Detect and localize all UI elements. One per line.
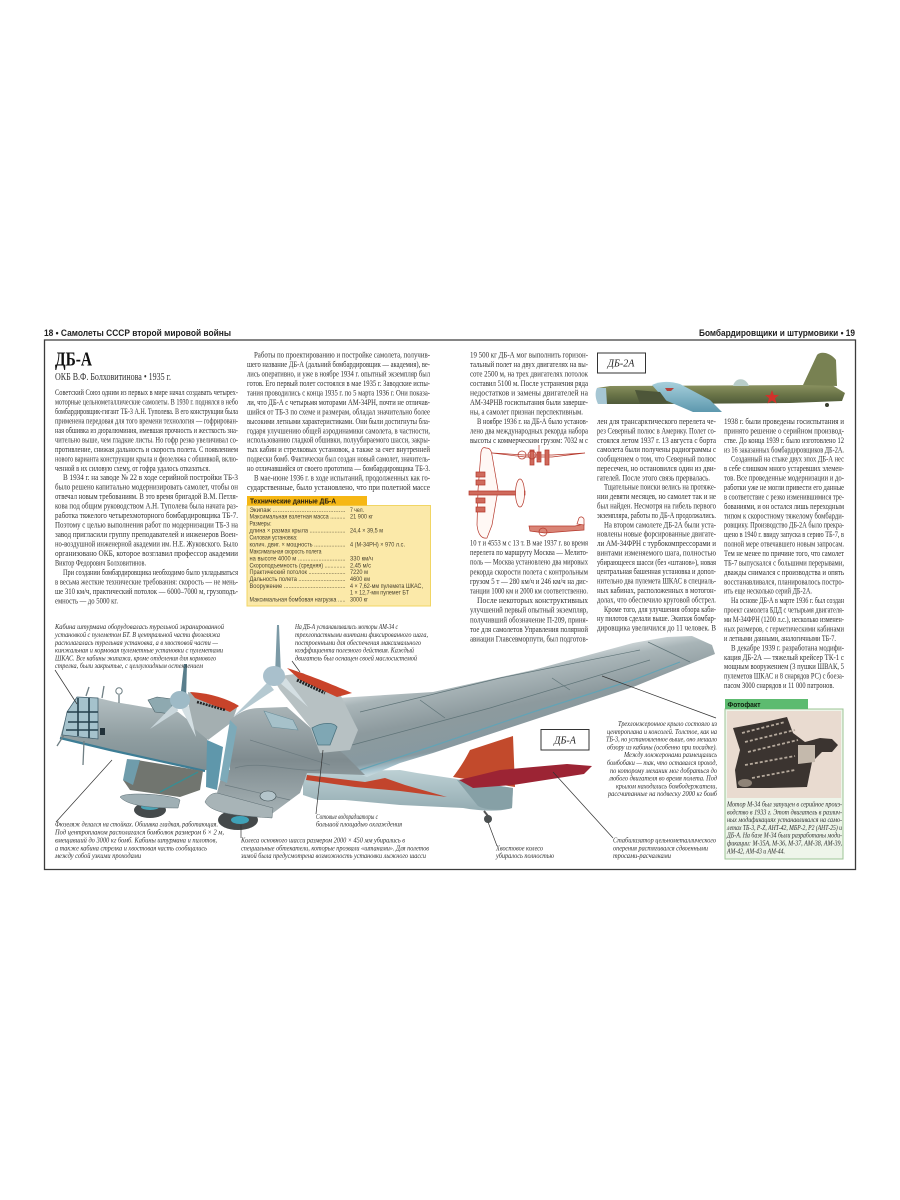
text column 2: высокими летными характеристиками. Они были достигнуты бла- — [247, 417, 430, 426]
text column 3 top: составил 5100 м. После устранения ряда — [470, 379, 588, 388]
technical data rows: Практический потолок ........................ — [250, 569, 346, 576]
callout: wheels: специальные обтекатели, которые прозвали «штанами». Для полетов — [241, 844, 429, 852]
text column 5: В декабре 1939 г. разработана модифи- — [731, 643, 844, 652]
cockpit — [148, 697, 172, 714]
photo fact caption — [726, 800, 843, 855]
text column 3 bottom — [470, 538, 589, 644]
main wing — [330, 636, 715, 777]
callout: fuselage: Фюзеляж делался на стойках. Обшивка гладкая, работающая. — [55, 820, 218, 828]
label: DB-A: ДБ-А — [553, 736, 577, 746]
photo fact caption: АМ-42, АМ-43 и АМ-44. — [726, 847, 785, 855]
callout: wheels — [240, 836, 429, 860]
text column 1: ше 310 км/ч, практический потолок — 6000–7000 м, грузоподъ- — [55, 587, 238, 596]
text column 5: кация ДБ-2А — тяжелый крейсер ТК-1 с — [724, 653, 844, 662]
nose glazing — [62, 697, 98, 739]
outer propeller — [233, 625, 308, 717]
technical data rows: Вооружение ....................................... — [250, 583, 346, 590]
text column 4: долах, что обеспечило круговой обстрел. — [597, 595, 716, 604]
text column 4: нии девяти месяцев, но самолет так и не — [597, 492, 716, 501]
callout: wing: бомбобаки — так, что оставался проход, — [607, 759, 717, 767]
text column 4 — [597, 417, 716, 633]
DB-2A red wing star — [665, 388, 674, 391]
DB-2A side-view profile — [596, 353, 845, 412]
callout: wing: любого двигателя во время полета. Под — [608, 775, 717, 783]
text column 1 — [55, 388, 239, 605]
text column 1: В 1934 г. на заводе № 22 в ходе серийной постройки ТБ-3 — [63, 473, 238, 482]
panel: technical data — [247, 496, 430, 606]
text column 5: стве. До конца 1939 г. было изготовлено 12 — [724, 436, 844, 445]
technical data rows: 7220 м — [350, 569, 368, 576]
nose guns and aerials — [57, 686, 119, 765]
text column 2: использованию гладкой обшивки, полуубираемого шасси, закры- — [247, 436, 430, 445]
callout: engines: построенными для обеспечения максимального — [295, 639, 421, 647]
subtitle: ОКБ В.Ф. Болховитинова • 1935 г. — [55, 372, 171, 383]
text column 5: Созданный на стыке двух эпох ДБ-А нес — [731, 455, 844, 464]
technical data rows: 3000 кг — [350, 596, 369, 603]
text column 4: стоялся летом 1937 г. 13 августа с борта — [597, 436, 716, 445]
text column 3 top: лено два международных рекорда набора — [470, 426, 588, 436]
text column 5: мощным вооружением (3 пушки ШВАК, 5 — [724, 662, 844, 671]
technical data rows: Скороподъемность (средняя) .............. — [250, 562, 346, 569]
text column 2: подвески бомб. Фактически был создан новый самолет, значитель- — [247, 455, 430, 464]
callout: tail wheel — [495, 844, 554, 860]
text column 1: моторные цельнометаллические самолеты. В 1930 г. поднялся в небо — [55, 398, 238, 406]
DB-2A fuselage — [597, 385, 845, 404]
callout: wing: ТБ-3, но установленное выше, оно мешало — [606, 736, 717, 744]
text column 4: рез Северный полюс в Америку. Полет со- — [597, 426, 716, 435]
technical data rows: Силовая установка: — [250, 534, 298, 541]
text column 5: восстанавливался, планировалось постро- — [724, 577, 844, 586]
text column 3 bottom: улучшений первый опытный экземпляр, — [470, 606, 588, 615]
text column 1: организовано ОКБ, которое возглавил профессор академии — [55, 549, 238, 558]
technical data rows: Размеры: — [250, 521, 272, 528]
title: ДБ-А — [55, 348, 92, 370]
technical data rows: 4 (М-34РН) × 970 л.с. — [350, 541, 405, 548]
text column 3 top: В ноябре 1936 г. на ДБ-А было установ- — [477, 417, 588, 426]
nose side window — [100, 728, 105, 735]
text column 1: нового варианта конструкции крыла и фюзеляжа с обшивкой, вклю- — [55, 454, 238, 463]
landing gear legs — [206, 740, 223, 790]
callout: fuselage — [54, 820, 224, 860]
text column 5: На основе ДБ-А в марте 1936 г. был создан — [731, 596, 844, 605]
callout: cockpit armament: ШКАС. Все кабины экипажа, кроме отделения для кормового — [54, 654, 216, 662]
text column 2: ли, что ДБ-А с четырьмя моторами АМ-34РН, почти не отличав- — [247, 398, 430, 407]
text column 3 top: недостатков и замены двигателей на — [470, 388, 588, 398]
text column 4: новлены новые форсированные двигате- — [597, 530, 716, 539]
text column 3 bottom: перелета по маршруту Москва — Мелито- — [470, 548, 588, 557]
technical data rows: колич. двиг. × мощность .................... — [250, 541, 346, 548]
text column 3 top: АМ-34РНВ госиспытания были заверше- — [470, 398, 588, 407]
text column 1: отвечал новым требованиям. В это время бригадой В.М. Петля- — [55, 492, 238, 501]
callout: cockpit armament — [54, 623, 224, 670]
text column 5: дважды снимался с производства и опять — [724, 568, 844, 577]
technical data rows: 21 900 кг — [350, 514, 374, 521]
callout: engines: двигатель был оснащен своей маслосистемой — [295, 654, 417, 662]
DB-2A tail fin — [803, 353, 837, 386]
text column 5: из 16 заказанных бомбардировщиков ДБ-2А. — [724, 445, 844, 454]
technical data rows: Максимальная скорость полета — [250, 548, 322, 555]
text column 1: чительно выше, чем гладкие листы. Но гофр резко увеличивал со- — [55, 435, 238, 444]
text column 2: тых кабин и стрелковых установок, а также за счет внутренней — [247, 445, 430, 454]
inner propeller — [150, 664, 196, 737]
text column 4: На втором самолете ДБ-2А были уста- — [604, 520, 716, 529]
technical data rows: 24,4 × 39,5 м — [350, 528, 383, 535]
technical data rows — [250, 507, 423, 603]
text column 5: бованиями, и он остался лишь переходным — [724, 502, 845, 511]
text column 5: полной мере отвечавшего новым запросам. — [724, 540, 844, 549]
DB-2A canopy — [733, 379, 749, 386]
side view — [529, 517, 584, 536]
callout: stabilizer: Стабилизатор цельнометаллического — [613, 836, 716, 844]
text column 5: щено в 1940 г. ввиду запуска в серию ТБ-7, в — [724, 530, 844, 539]
text column 5: в соответствие с резко изменившимися тре- — [724, 492, 844, 501]
callout: tail wheel: Хвостовое колесо — [495, 844, 543, 852]
text column 4: лен для трансарктического перелета че- — [597, 417, 716, 426]
exhaust stubs — [297, 680, 325, 693]
callout: cockpit armament: располагалась турельная установка, а в хвостовой части — — [54, 639, 219, 647]
callout: cockpit armament: Кабина штурмана оборудовалась турельной экранированной — [54, 623, 224, 631]
text column 2: сударственные, было установлено, что при полетной массе — [247, 483, 430, 492]
text column 5: Тем не менее по причине того, что самолет — [724, 549, 844, 558]
text column 5: типом к скоростному тяжелому бомбарди- — [724, 511, 844, 520]
technical data rows: 330 км/ч — [350, 555, 373, 562]
callout: stabilizer — [613, 836, 716, 860]
text column 2: готов. Его первый полет состоялся в мае 1935 г. Заводские испы- — [247, 379, 430, 388]
text column 1: работка тяжелого четырехмоторного бомбардировщика ТБ-7. — [55, 511, 238, 520]
tail unit dark underside — [457, 780, 513, 810]
technical data heading: Технические данные ДБ-А — [250, 497, 336, 506]
text column 4: ну пилотов сделали выше. Экипаж бомбар- — [597, 614, 716, 623]
DB-2A red star — [765, 390, 779, 404]
text column 4: центральная башенная установка и допол- — [597, 567, 716, 576]
text column 4: гателей. После этого связь прервалась. — [597, 473, 710, 482]
rear fuselage red stripe — [306, 775, 447, 797]
text column 5: работки уже не могли привести его данные — [724, 483, 844, 492]
photo fact caption: Мотор М-34 был запущен в серийное произ- — [726, 800, 843, 808]
text column 3 bottom: получивший обозначение П-209, приня- — [470, 615, 588, 624]
forward fuselage — [60, 697, 207, 770]
text column 1: в весьма жесткие технические требования: скорость — не мень- — [55, 577, 238, 586]
text column 3 top: ны, а самолет признан перспективным. — [470, 408, 583, 416]
text column 3 top — [470, 350, 589, 445]
technical data rows: длина × размах крыла ....................... — [250, 528, 346, 535]
text column 3 bottom: рекорда скорости полета с контрольным — [470, 567, 589, 576]
technical data rows: 2,45 м/с — [350, 562, 371, 569]
text column 5: ровщику. Производство ДБ-2А было прекра- — [724, 521, 844, 530]
bomb bay belly — [123, 760, 203, 797]
callout: wing: по которому механик мог добраться до — [610, 767, 717, 775]
text column 1: Советский Союз одним из первых в мире начал создавать четырех- — [55, 388, 238, 397]
text column 5: и летными данными, аналогичными ТБ-7. — [724, 634, 836, 643]
text column 5: принято решение о серийном производ- — [724, 426, 844, 435]
text column 1: противление, снижая дальность и скорость полета. С появлением — [55, 445, 239, 454]
text column 3 top: высоты с коммерческим грузом: 7032 м с — [470, 436, 588, 445]
tail fin — [453, 736, 515, 787]
text column 3 bottom: грузом 5 т — 280 км/ч и 246 км/ч на дис- — [470, 577, 588, 586]
technical data rows: Экипаж ........................................... — [250, 507, 346, 514]
outer wheel fairing — [205, 793, 273, 818]
three-view red line drawing — [469, 445, 585, 538]
text column 5: проект самолета БДД с четырьмя двигателя- — [724, 606, 844, 615]
callout: fuselage: между собой узкими проходами — [54, 852, 141, 860]
large centre nacelle — [217, 707, 365, 813]
text column 1: применена передовая для того времени технология — гофрирован- — [55, 416, 238, 425]
text column 1: было решено капитально модернизировать самолет, чтобы он — [55, 483, 238, 492]
running head: left: 18 • Самолеты СССР второй мировой войны — [44, 328, 231, 339]
text column 1: Поэтому с целью выполнения работ по модернизации ТБ-3 на — [55, 521, 238, 530]
inner wheel — [134, 802, 166, 818]
callout: cockpit armament: кинжальная и кормовая пулеметные установки с пулеметами — [55, 646, 223, 654]
technical data rows: на высоте 4000 м .............................. — [250, 555, 346, 562]
callout: fuselage: вмещавший до 3000 кг бомб. Кабины штурмана и пилотов, — [55, 836, 217, 844]
text column 1: При создании бомбардировщика необходимо было укладываться — [63, 568, 238, 577]
inner landing gear strut — [123, 759, 140, 785]
callout: engines: На ДБ-А устанавливались моторы АМ-34 с — [294, 623, 399, 631]
fuselage lower blue edge — [60, 738, 205, 771]
text column 5: тов. Все проведенные модернизации и до- — [724, 474, 844, 483]
photo fact caption: фикации: М-35А, М-36, М-37, АМ-38, АМ-39, — [727, 840, 842, 848]
page frame — [44, 340, 856, 870]
callout: cockpit armament: установкой с пулеметом БТ. В центральной части фюзеляжа — [54, 631, 220, 639]
tail wheel — [484, 811, 488, 816]
photo fact caption: летах ТБ-3, Р-Z, АНТ-42, МБР-2, Р2 (АНТ-25) и — [726, 824, 842, 832]
photo fact caption: водство в 1933 г. Этот двигатель в различ- — [727, 808, 843, 816]
panel: photo fact — [725, 699, 843, 859]
outer engine red top — [287, 668, 352, 697]
callout: wheels: зимой была предусмотрена возможность установки лыжного шасси — [240, 852, 426, 860]
callout: wing — [606, 720, 717, 798]
leader lines — [55, 661, 716, 846]
text column 3 bottom: танции 1000 км и 2000 км соответственно. — [470, 586, 588, 596]
text column 4: дировщика увеличился до 11 человек. В — [597, 624, 716, 633]
text column 3 bottom: После некоторых конструктивных — [477, 596, 589, 605]
callout: fuselage: а также кабина стрелка и хвостовая часть сообщались — [55, 844, 207, 852]
text column 1: ченной в их силовую схему, от гофра удалось отказаться. — [55, 464, 210, 473]
callout: engines — [294, 623, 428, 662]
callout: tail wheel: убиралось полностью — [495, 852, 554, 860]
DB-2A engine — [635, 390, 668, 404]
text column 4: ных кабинах, расположенных в мотогон- — [597, 586, 716, 595]
text column 4: сообщением о том, что Северный полюс — [597, 455, 716, 464]
text column 2 — [247, 350, 430, 492]
text column 1: емность — до 5000 кг. — [55, 596, 118, 605]
text column 4: винтами изменяемого шага, полностью — [597, 548, 716, 558]
text column 4: Кроме того, для улучшения обзора каби- — [604, 605, 716, 614]
text column 5: ми М-34ФРН (1200 л.с.), несколько изменен- — [724, 615, 844, 624]
text column 3 top: соте 2500 м, на трех двигателях потолок — [470, 370, 589, 378]
text column 5: пасом 3000 снарядов и 11 000 патронов. — [724, 681, 834, 690]
text column 5 — [724, 417, 845, 690]
text column 2: лись оперативно, и уже в ноябре 1934 г. опытный экземпляр был — [247, 369, 430, 378]
text column 4: самолета были получены радиограммы с — [597, 445, 716, 454]
inner engine nacelle — [188, 692, 238, 740]
callout: wing: Трехлонжеронное крыло состояло из — [618, 720, 717, 728]
rear fuselage — [303, 770, 513, 811]
text column 2: шего название ДБ-А (дальний бомбардировщик — академия), ве- — [247, 360, 430, 369]
label: DB-A — [541, 730, 589, 750]
text column 3 bottom: тое для самолетов Управления полярной — [470, 625, 588, 634]
technical data rows: 4 × 7,62-мм пулемета ШКАС, — [350, 583, 423, 590]
text column 4: Тщательные поиски велись на протяже- — [604, 483, 716, 492]
technical data rows: 1 × 12,7-мм пулемет БТ — [350, 590, 409, 597]
plan view — [469, 448, 525, 538]
callout: wheels: Колеса основного шасси размером 2000 × 450 мм убирались в — [240, 836, 405, 844]
inner engine red cowl — [190, 692, 239, 712]
technical data rows: 7 чел. — [350, 507, 364, 514]
text column 4: убирающееся шасси (без «штанов»), новая — [597, 558, 716, 567]
technical data rows: Максимальная взлетная масса .......... — [250, 514, 346, 521]
callout: wing: Между лонжеронами размещались — [623, 751, 717, 759]
text column 2: В мае-июне 1936 г. в ходе испытаний, продолженных как го- — [254, 474, 430, 483]
callout: fuselage: Под центропланом располагался бомболюк размером 6 × 2 м, — [54, 828, 224, 836]
callout: stabilizer: тросами-расчалками — [613, 852, 671, 860]
photo fact heading — [725, 699, 808, 709]
inner wheel fairing — [120, 794, 180, 808]
text column 3 bottom: поль — Москва установлено два мировых — [470, 558, 589, 567]
text column 2: Работы по проектированию и постройке самолета, получив- — [254, 350, 430, 360]
text column 2: шийся от ТБ-3 по схеме и размерам, обладал значительно более — [247, 407, 430, 416]
text column 4: был найден. Несмотря на гибель первого — [597, 502, 716, 510]
text column 1: бомбардировщик-гигант ТБ-3 А.Н. Туполева. В его конструкции была — [55, 407, 238, 416]
text column 2: годаря улучшению общей аэродинамики самолета, в частности, — [247, 426, 430, 435]
text column 3 top: тальный полет на двух двигателях на вы- — [470, 360, 588, 369]
text column 5: ных размеров, с герметическими кабинами — [724, 624, 844, 634]
outer wheel — [218, 810, 258, 830]
text column 1: но-воздушной инженерной академии им. Н.Е. Жуковского. Было — [55, 540, 238, 548]
text column 2: но отличавшийся от своего прототипа — бомбардировщика ТБ-3. — [247, 464, 430, 473]
callout: cockpit armament: стрелка, были закрытые, с целлулоидным остеклением — [55, 662, 203, 670]
text column 1: ная обшивка из дюралюминия, имевшая прочность и жесткость зна- — [55, 426, 238, 435]
callout: wing: крылом находились бомбодержатели, — [616, 782, 717, 790]
stabilizer — [459, 764, 592, 788]
callout: wing: рассчитанные на подвеску 2000 кг бомб — [607, 790, 717, 798]
text column 2: тания проводились с конца 1935 г. по 5 марта 1936 г. Они показа- — [247, 388, 430, 397]
DB-2A nose — [596, 388, 607, 404]
text column 3 top: 19 500 кг ДБ-А мог выполнить горизон- — [470, 350, 588, 360]
photo fact heading: Фотофакт — [728, 700, 761, 709]
outer engine cowl — [272, 673, 358, 753]
main illustration: DB-A bomber — [57, 625, 715, 830]
callout: radiators: большой площадью охлаждения — [316, 820, 402, 828]
DB-2A tail wheel — [825, 403, 829, 407]
callout: stabilizer: оперения растягивался сдвоенными — [613, 844, 708, 852]
text column 5: ТБ-7 выпускался с большими перерывами, — [724, 558, 844, 567]
callout: engines: трехлопастными винтами фиксированного шага, — [295, 631, 428, 639]
front view — [492, 445, 585, 465]
text column 4: нительно два пулемета ШКАС в специаль- — [597, 577, 716, 586]
callout: radiators: Сотовые водорадиаторы с — [316, 813, 379, 821]
engine photo — [727, 711, 841, 798]
photo fact caption: ДБ-А. На базе М-34 были разработаны моди- — [726, 832, 843, 840]
label: DB-2A: ДБ-2А — [607, 358, 635, 370]
callout: wing: центроплана и консолей. Толстое, как на — [607, 728, 717, 736]
photo fact caption: ных модификациях устанавливался на само- — [727, 816, 843, 824]
callout: wing: обзору из кабины (особенно при посадке). — [607, 743, 717, 751]
DB-2A wing — [652, 382, 722, 412]
technical data rows: Дальность полета .............................. — [250, 576, 346, 583]
text column 3 bottom: авиации Главсевморпути, был подготов- — [470, 634, 588, 644]
text column 5: 1938 г. были проведены госиспытания и — [724, 417, 844, 426]
technical data rows: Максимальная бомбовая нагрузка ..... — [250, 596, 346, 603]
radiator grille — [264, 711, 298, 730]
text column 5: ить еще несколько серий ДБ-2А. — [724, 587, 812, 596]
outer engine radiator — [312, 723, 337, 745]
text column 4: экземпляра, работы по ДБ-А продолжались. — [597, 511, 716, 520]
text column 1: завод пригласили группу преподавателей и инженеров Воен- — [55, 530, 238, 539]
text column 4: пересечен, но остановился один из дви- — [597, 464, 716, 473]
text column 5: в себе слишком много устаревших элемен- — [724, 464, 844, 473]
text column 1: Виктор Федорович Болховитинов. — [55, 558, 146, 567]
callout: engines: коэффициента полезного действия. Каждый — [295, 646, 414, 654]
technical data rows: 4600 км — [350, 576, 370, 583]
text column 3 bottom: 10 т и 4553 м с 13 т. В мае 1937 г. во время — [470, 538, 588, 548]
text column 4: ли АМ-34ФРН с турбокомпрессорами и — [597, 539, 716, 548]
text column 5: пулеметов ШКАС и 8 снарядов РС) с боеза- — [724, 672, 844, 681]
label: DB-2A — [598, 353, 646, 373]
callout: radiators — [316, 813, 402, 828]
running head: right: Бомбардировщики и штурмовики • 19 — [699, 328, 855, 339]
text column 1: кова под общим руководством А.Н. Туполева была начата раз- — [55, 502, 238, 511]
wheel well hatch — [260, 791, 276, 801]
